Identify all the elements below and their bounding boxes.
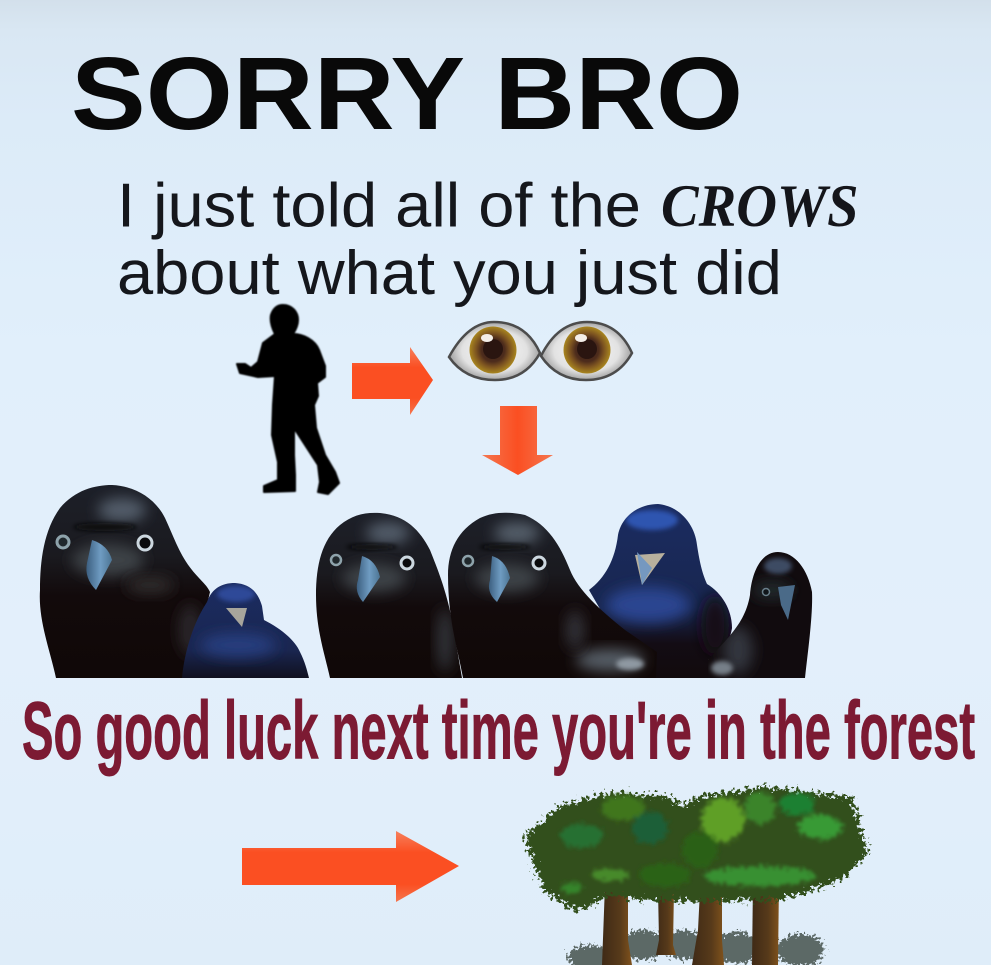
crow 2 <box>180 580 312 680</box>
subtitle lines: about what you just did <box>117 237 782 307</box>
crow 4 <box>445 508 660 680</box>
arrow: down to crows <box>482 406 553 475</box>
trunks <box>656 890 676 955</box>
crow 3 <box>316 512 462 678</box>
crows word: CROWS <box>661 173 858 239</box>
canopy highlights <box>560 792 842 894</box>
canopy <box>524 787 868 912</box>
arrow: right to eyes <box>352 347 433 415</box>
illustration layer <box>40 302 872 965</box>
crows group <box>30 480 815 680</box>
crow 6 <box>705 548 815 680</box>
icon: man silhouette <box>237 305 339 494</box>
icon: eyes <box>449 322 632 380</box>
title: SORRY BRO <box>71 36 743 151</box>
subtitle lines: I just told all of the <box>117 170 641 240</box>
ground shrubs <box>568 930 824 965</box>
arrow: right to forest <box>242 831 459 902</box>
subtitle <box>117 170 858 307</box>
crow 1 <box>40 485 210 678</box>
crow 5 <box>585 500 735 680</box>
left eye <box>449 322 540 380</box>
slogan: So good luck next time you're in the forest <box>22 684 975 776</box>
icon: forest <box>524 787 868 965</box>
subtitle lines <box>117 170 782 307</box>
right eye <box>541 322 632 380</box>
